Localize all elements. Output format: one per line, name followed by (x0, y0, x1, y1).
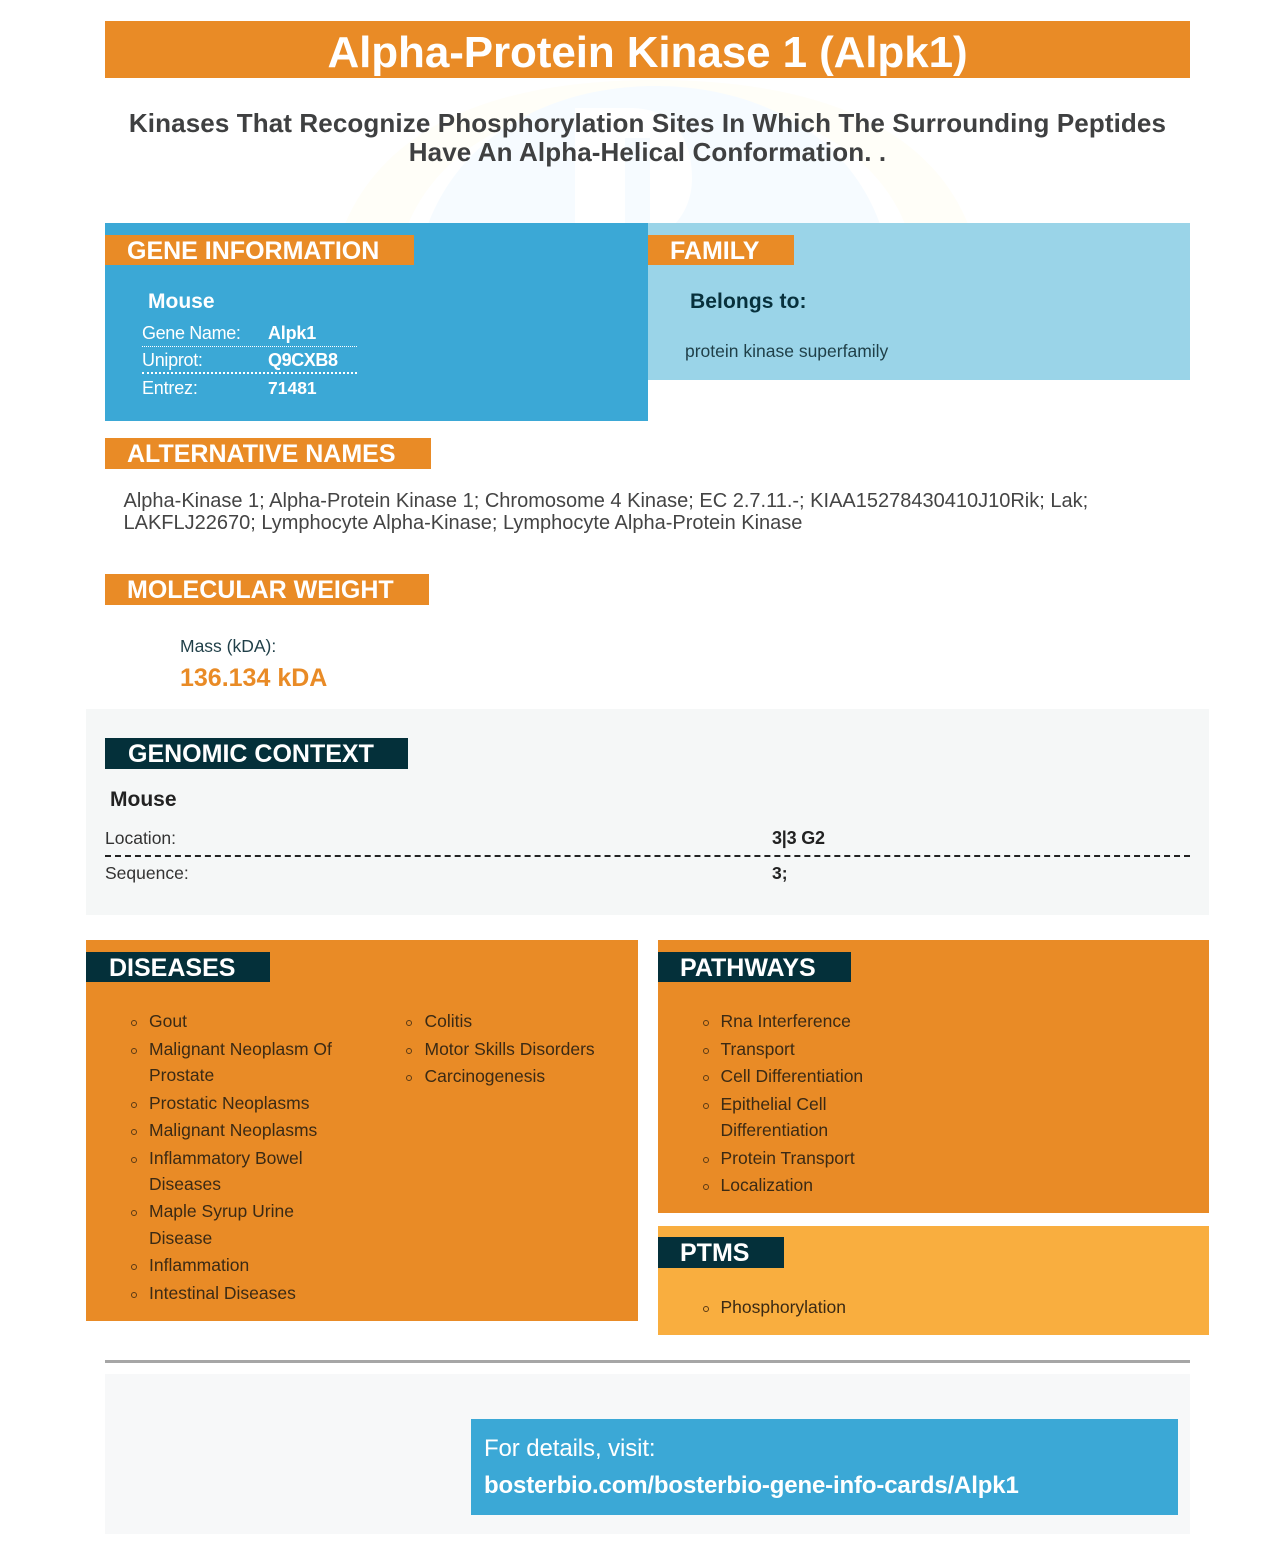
disease list column 1: Prostatic Neoplasms (149, 1093, 309, 1113)
gene facts table: Q9CXB8 (268, 350, 338, 370)
disease list column 2: Motor Skills Disorders (424, 1039, 595, 1059)
disease list column 1: Malignant Neoplasm Of (149, 1039, 332, 1059)
panel: genomic context (86, 709, 1209, 915)
gene facts table: Alpk1 (268, 323, 316, 343)
title banner (105, 21, 1190, 78)
disease list column 2 (406, 1011, 595, 1086)
panel: pathways (658, 940, 1209, 1213)
pathway list: Rna Interference (720, 1011, 851, 1031)
heading: family: FAMILY (670, 237, 759, 265)
sequence row: 3; (772, 863, 788, 883)
heading: family (648, 235, 794, 265)
gene facts table (142, 323, 357, 398)
gene facts table: Gene Name: (142, 323, 241, 343)
disease list column 1: Inflammation (149, 1255, 249, 1275)
location row: 3|3 G2 (772, 828, 825, 848)
disease list column 1: Malignant Neoplasms (149, 1120, 317, 1140)
panel: ptms (658, 1226, 1209, 1335)
callout: details link: For details, visit: (484, 1435, 655, 1462)
belongs to label: Belongs to: (690, 290, 807, 313)
gene facts table: 71481 (268, 378, 317, 398)
disease list column 1: Intestinal Diseases (149, 1283, 296, 1303)
disease list column 1: Diseases (149, 1174, 221, 1194)
species label: Mouse (110, 788, 177, 811)
pathway list: Localization (720, 1175, 813, 1195)
callout: details link (471, 1419, 1178, 1515)
pathway list: Transport (720, 1039, 795, 1059)
heading: gene information: GENE INFORMATION (127, 237, 379, 265)
mass label: Mass (kDA): (180, 636, 276, 656)
footer panel (105, 1374, 1190, 1534)
disease list column 1: Gout (149, 1011, 187, 1031)
species label: Mouse (148, 290, 215, 313)
pathway list: Epithelial Cell (720, 1094, 827, 1114)
alternative names text: Alpha-Kinase 1; Alpha-Protein Kinase 1; Chromosome 4 Kinase; EC 2.7.11.-; KIAA15278430410J10Rik; Lak; (124, 490, 1088, 512)
heading: genomic context: GENOMIC CONTEXT (128, 740, 374, 768)
subtitle: Kinases That Recognize Phosphorylation Sites In Which The Surrounding Peptides (129, 108, 1166, 138)
ptm list: Phosphorylation (720, 1297, 846, 1317)
gene facts table: Uniprot: (142, 350, 203, 370)
pathway list: Cell Differentiation (720, 1066, 863, 1086)
heading: ptms: PTMS (680, 1239, 749, 1267)
disease list column 1: Maple Syrup Urine (149, 1201, 294, 1221)
alternative names text: LAKFLJ22670; Lymphocyte Alpha-Kinase; Lymphocyte Alpha-Protein Kinase (124, 512, 802, 534)
callout: details link: bosterbio.com/bosterbio-gene-info-cards/Alpk1 (484, 1472, 1019, 1499)
disease list column 2: Colitis (424, 1011, 472, 1031)
disease list column 1: Inflammatory Bowel (149, 1148, 303, 1168)
heading: diseases: DISEASES (109, 954, 235, 982)
disease list column 1: Disease (149, 1228, 212, 1248)
panel: family (648, 223, 1190, 380)
sequence row (105, 863, 788, 883)
panel: diseases (86, 940, 638, 1321)
heading: pathways: PATHWAYS (680, 954, 816, 982)
heading: molecular weight: MOLECULAR WEIGHT (127, 576, 394, 604)
mass value: 136.134 kDA (180, 664, 327, 692)
background watermark logo (428, 86, 880, 223)
sequence row: Sequence: (105, 863, 189, 883)
location row (105, 828, 825, 848)
heading: diseases (86, 952, 270, 982)
panel: gene information (105, 223, 648, 421)
heading: ptms (658, 1237, 784, 1268)
location row: Location: (105, 828, 176, 848)
disease list column 1: Prostate (149, 1065, 214, 1085)
family value: protein kinase superfamily (685, 341, 888, 361)
alternative names text (124, 490, 1088, 534)
heading: alternative names: ALTERNATIVE NAMES (127, 440, 396, 468)
pathway list: Differentiation (720, 1120, 828, 1140)
subtitle: Have An Alpha-Helical Conformation. . (409, 137, 886, 167)
pathway list: Protein Transport (720, 1148, 855, 1168)
disease list column 2: Carcinogenesis (424, 1066, 545, 1086)
heading: pathways (658, 952, 851, 982)
gene facts table: Entrez: (142, 378, 198, 398)
pathway list (703, 1011, 863, 1195)
subtitle (129, 108, 1166, 167)
title text: Alpha-Protein Kinase 1 (Alpk1) (327, 28, 968, 77)
disease list column 1 (131, 1011, 332, 1303)
